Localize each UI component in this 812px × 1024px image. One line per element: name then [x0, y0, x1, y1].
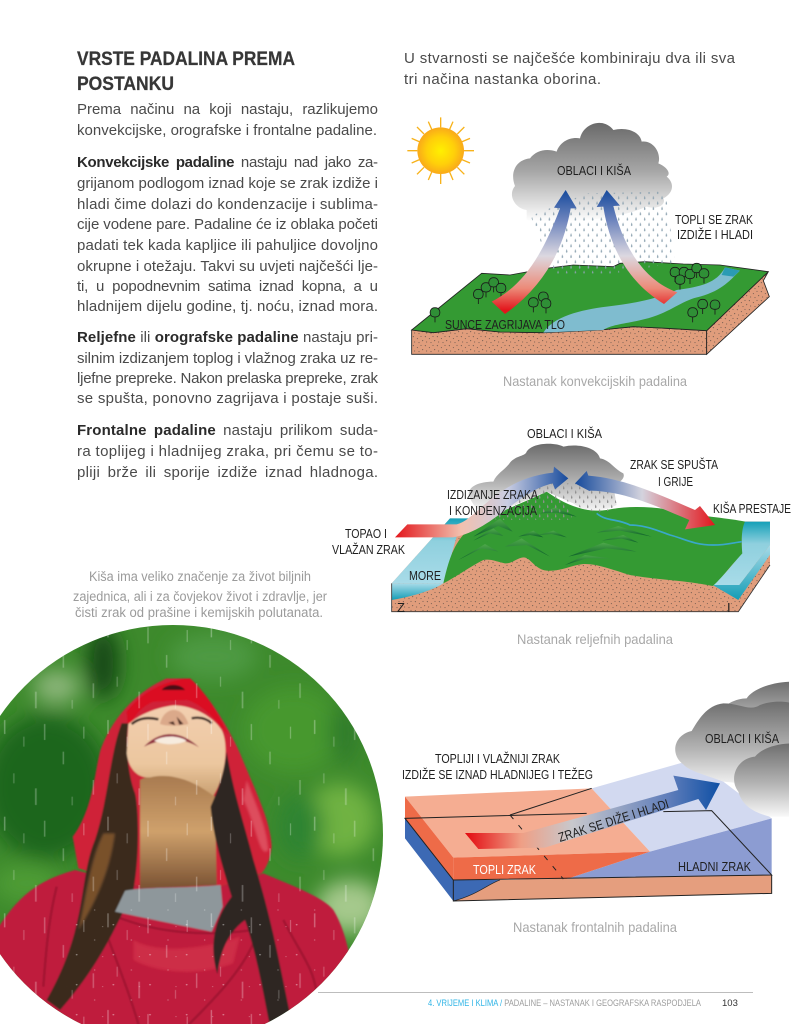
paragraph: convective precipitation: grijanom podlogom iznad koje se zrak izdiže i: [77, 175, 378, 192]
right column intro text: U stvarnosti se najčešće kombiniraju dva ili sva: [404, 50, 736, 67]
label: air lifting and condensation: I KONDENZACIJA: [449, 503, 537, 518]
label: warm air rises and cools: [675, 212, 753, 242]
land block: [412, 262, 769, 354]
hair: [47, 723, 138, 1010]
right column intro text: tri načina nastanka oborina.: [404, 71, 601, 88]
footer text: 4. VRIJEME I KLIMA / PADALINE – NASTANAK I GEOGRAFSKA RASPODJELA: [428, 998, 702, 1009]
paragraph: orographic precipitation: ljefne prepreke. Nakon prelaska prepreke, zrak: [77, 370, 378, 387]
river: [597, 513, 742, 545]
icon: cloud: [469, 444, 624, 515]
title: [77, 48, 295, 95]
diagram: orographic precipitation: [332, 426, 791, 647]
mountain ridges: [458, 507, 652, 565]
shirt: [115, 885, 223, 932]
label: warm air rises and cools: TOPLI SE ZRAK: [675, 212, 753, 227]
photo: woman in red raincoat in the rain: [0, 620, 400, 1024]
intro paragraph: [77, 101, 378, 139]
title: POSTANKU: [77, 73, 174, 95]
title: VRSTE PADALINA PREMA: [77, 48, 295, 70]
paragraph: frontal precipitation: pliji brže ili sporije izdiže iznad hladnoga.: [77, 464, 378, 481]
label: warm air rises and cools: IZDIŽE I HLADI: [677, 227, 753, 242]
diagram: convective precipitation: [407, 117, 769, 389]
label: west: Z: [397, 600, 405, 615]
rain field: [493, 483, 618, 520]
warm air wedge: [405, 788, 650, 880]
label: warmer humid air rises: IZDIŽE SE IZNAD HLADNIJEG I TEŽEG: [402, 767, 593, 782]
arrow: air rises and cools: [465, 776, 720, 849]
icon: cloud: [512, 123, 672, 221]
photo caption: [73, 569, 327, 620]
label: sea: MORE: [409, 568, 441, 583]
photo caption: čisti zrak od prašine i kemijskih polutanata.: [75, 605, 323, 620]
arrow: warm humid air rising: [395, 467, 568, 537]
label: rain stops: KIŠA PRESTAJE: [713, 501, 791, 516]
label: air lifting and condensation: IZDIZANJE ZRAKA: [447, 487, 538, 502]
photo caption: zajednica, ali i za čovjekov život i zdravlje, jer: [73, 589, 327, 604]
label: warm humid air: VLAŽAN ZRAK: [332, 542, 405, 557]
paragraph: frontal precipitation: [77, 422, 378, 481]
paragraph: convective precipitation: hladi čime dolazi do kondenzacije i sublima-: [77, 196, 378, 213]
arrow: right rising air: [597, 190, 677, 304]
icon: sun: [407, 117, 474, 184]
photo caption: Kiša ima veliko značenje za život biljnih: [89, 569, 311, 584]
raindrops on photo: [0, 620, 400, 1024]
label: air descends and warms: [630, 457, 718, 489]
intro paragraph: Prema načinu na koji nastaju, razlikujemo: [77, 101, 378, 118]
label: clouds and rain: OBLACI I KIŠA: [557, 163, 631, 178]
block outlines: [405, 788, 772, 901]
label: clouds and rain: OBLACI I KIŠA: [527, 426, 602, 441]
paragraph: convective precipitation: padati tek kada kapljice ili pahuljice dovoljno: [77, 237, 378, 254]
label: warm air: TOPLI ZRAK: [473, 862, 536, 877]
paragraph: orographic precipitation: [77, 329, 378, 407]
label: air lifting and condensation: [447, 487, 538, 518]
icon: trees: [430, 263, 720, 322]
right column intro text: [404, 50, 736, 88]
cold air wedge: [405, 762, 772, 901]
caption: Nastanak reljefnih padalina: [517, 631, 673, 647]
arrow: air descends and warms: [575, 471, 715, 529]
label: east: I: [727, 600, 731, 615]
rain field: [531, 192, 675, 273]
diagram: frontal precipitation: [402, 682, 793, 935]
paragraph: orographic precipitation: se spušta, ponovno zagrijava i postaje suši.: [77, 390, 378, 407]
paragraph: frontal precipitation: ra toplijeg i hladnijeg zraka, pri čemu se to-: [77, 443, 378, 460]
paragraph: orographic precipitation: silnim izdizanjem toplog i vlažnog zraka uz re-: [77, 350, 378, 367]
label: warmer humid air rises: TOPLIJI I VLAŽNIJI ZRAK: [435, 751, 560, 766]
label: warm humid air: TOPAO I: [345, 526, 387, 541]
label: warm humid air: [332, 526, 405, 557]
hood: [73, 678, 272, 887]
paragraph: frontal precipitation: Frontalne padaline nastaju prilikom suda-: [77, 422, 378, 439]
paragraph: convective precipitation: [77, 154, 378, 315]
label: clouds and rain: OBLACI I KIŠA: [705, 731, 779, 746]
icon: clouds: [675, 682, 793, 817]
caption: Nastanak konvekcijskih padalina: [503, 373, 687, 389]
footer text: 103: [722, 998, 738, 1009]
arrow: left rising air: [492, 190, 577, 314]
face: [127, 705, 226, 796]
intro paragraph: konvekcijske, orografske i frontalne padaline.: [77, 122, 377, 139]
label: warmer humid air rises: [402, 751, 593, 782]
terrain block: [392, 492, 770, 612]
label: air descends and warms: I GRIJE: [658, 474, 693, 489]
paragraph: convective precipitation: hladnijem dijelu godine, tj. noću, iznad mora.: [77, 298, 378, 315]
paragraph: convective precipitation: ti, u popodnevnim satima iznad kopna, a u: [77, 278, 378, 295]
paragraph: convective precipitation: cije vodene pare. Padaline će iz oblaka početi: [77, 216, 378, 233]
label: air descends and warms: ZRAK SE SPUŠTA: [630, 457, 718, 472]
coat: [0, 870, 350, 1024]
label: air rises and cools: ZRAK SE DIŽE I HLADI: [556, 796, 671, 845]
paragraph: convective precipitation: okrupne i otežaju. Takvi su uvjeti najčešći lje-: [77, 258, 378, 275]
footer rule: [318, 992, 753, 993]
paragraph: orographic precipitation: Reljefne ili orografske padaline nastaju pri-: [77, 329, 378, 346]
caption: Nastanak frontalnih padalina: [513, 919, 677, 935]
label: sun heats the ground: SUNCE ZAGRIJAVA TLO: [445, 317, 565, 332]
neck: [140, 775, 217, 888]
label: cold air: HLADNI ZRAK: [678, 859, 751, 874]
paragraph: convective precipitation: Konvekcijske padaline nastaju nad jako za-: [77, 154, 378, 171]
